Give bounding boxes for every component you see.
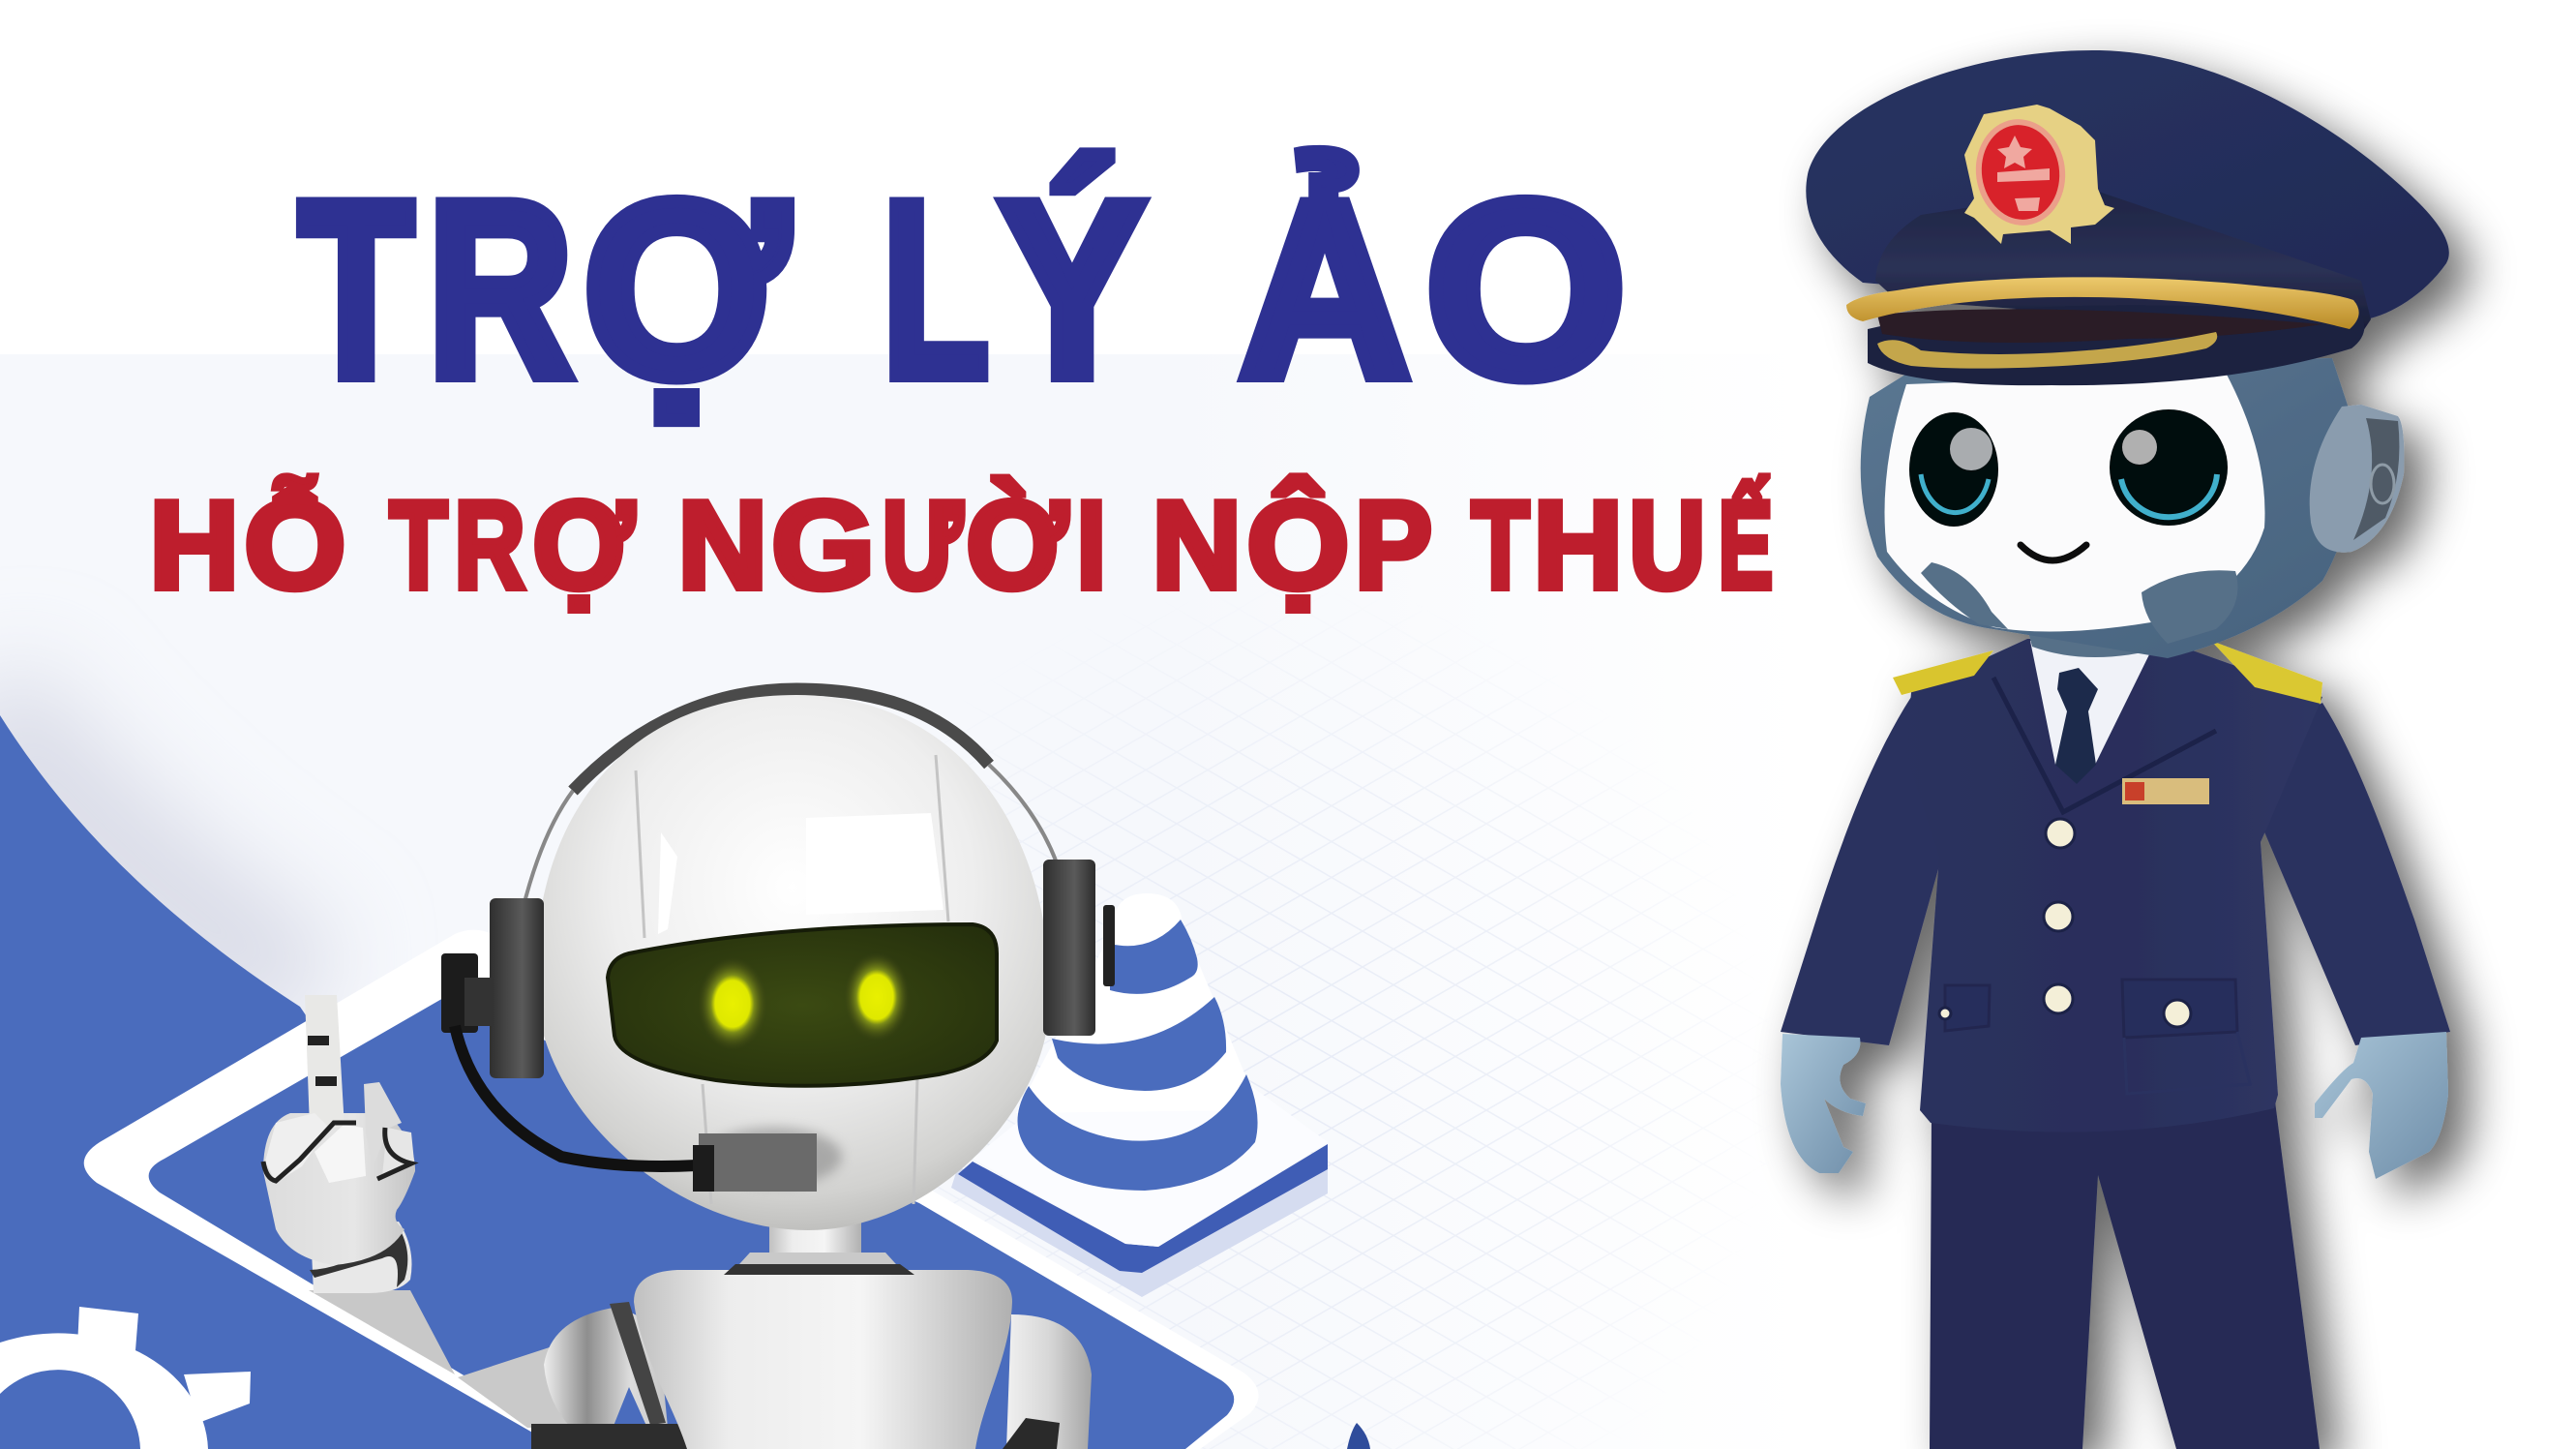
- cone base plate: [951, 1084, 1328, 1297]
- hat band: [1875, 189, 2371, 334]
- shirt and tie: [2030, 641, 2156, 784]
- tablet frame: [84, 930, 1259, 1449]
- gear icon: [0, 1307, 251, 1449]
- title: T: [299, 149, 413, 429]
- head silhouette: [1861, 358, 2355, 658]
- visor: [608, 924, 997, 1086]
- subtitle: Ộ: [1246, 474, 1349, 616]
- chin patches: [1921, 562, 2237, 644]
- subtitle: U: [1629, 476, 1705, 616]
- subtitle: [149, 474, 1773, 616]
- title: [299, 149, 1626, 429]
- ear: [2310, 405, 2404, 553]
- head seams: [636, 755, 948, 1204]
- smile: [2021, 545, 2086, 560]
- left shoulder: [544, 1307, 668, 1428]
- title: R: [428, 149, 573, 429]
- chin shade: [706, 1128, 842, 1186]
- right eye: [2110, 409, 2228, 526]
- left eye: [1909, 412, 1998, 527]
- hat emblem: [1964, 105, 2114, 244]
- headset band: [573, 689, 989, 791]
- epaulettes: [1893, 650, 1993, 695]
- subtitle: Ư: [883, 476, 964, 616]
- left hand: [1781, 1034, 1866, 1173]
- raised arm: [263, 995, 581, 1428]
- title: L: [883, 149, 989, 429]
- traffic cone: [951, 893, 1328, 1297]
- gold braid: [1877, 332, 2217, 369]
- jacket: [1906, 639, 2322, 1132]
- title: Ợ: [584, 149, 790, 429]
- face: [1885, 373, 2264, 631]
- subtitle: H: [1533, 476, 1623, 616]
- right ear cup: [1043, 860, 1115, 1036]
- small leaf bottom: [1347, 1423, 1370, 1449]
- cone body: [1016, 893, 1260, 1113]
- subtitle: Ợ: [532, 476, 634, 616]
- subtitle: Ế: [1719, 474, 1773, 616]
- hat visor: [1868, 305, 2364, 385]
- subtitle: R: [454, 476, 525, 616]
- hat crown: [1806, 50, 2449, 319]
- blue curved corner panel: [0, 697, 600, 1449]
- subtitle: Ờ: [966, 476, 1067, 616]
- right hand: [2315, 1032, 2448, 1179]
- title: Ả: [1240, 149, 1410, 429]
- subtitle: I: [1076, 476, 1106, 616]
- title: Ý: [1000, 149, 1145, 429]
- microphone boom: [455, 1026, 697, 1166]
- subtitle: T: [389, 476, 447, 616]
- hand: [263, 1113, 415, 1265]
- legs: [1930, 1094, 2320, 1449]
- subtitle: G: [771, 476, 875, 616]
- officer robot: [1781, 50, 2450, 1449]
- neck: [724, 1222, 914, 1275]
- gap in shoulder: [614, 1387, 646, 1426]
- tablet screen: [149, 997, 1234, 1449]
- head: [535, 695, 1050, 1230]
- torso: [634, 1270, 1012, 1449]
- neck: [2022, 610, 2172, 657]
- subtitle: T: [1471, 476, 1529, 616]
- white robot: [263, 689, 1115, 1449]
- left ear cup: [441, 898, 544, 1078]
- left arm: [1781, 697, 1993, 1045]
- hat: [1806, 50, 2449, 385]
- badge: [2122, 778, 2209, 804]
- subtitle: N: [1152, 476, 1242, 616]
- buttons: [1939, 819, 2191, 1027]
- subtitle: Ỗ: [244, 474, 345, 616]
- microphone: [693, 1133, 817, 1192]
- subtitle: P: [1355, 476, 1432, 616]
- right shoulder: [1006, 1314, 1092, 1449]
- gold cord: [1846, 277, 2359, 329]
- subtitle: N: [677, 476, 767, 616]
- background: [0, 354, 1690, 1449]
- dark body block: [531, 1424, 689, 1449]
- title: O: [1425, 149, 1626, 429]
- subtitle: H: [149, 476, 239, 616]
- right arm: [2226, 703, 2450, 1045]
- cone stripes: [1018, 920, 1258, 1191]
